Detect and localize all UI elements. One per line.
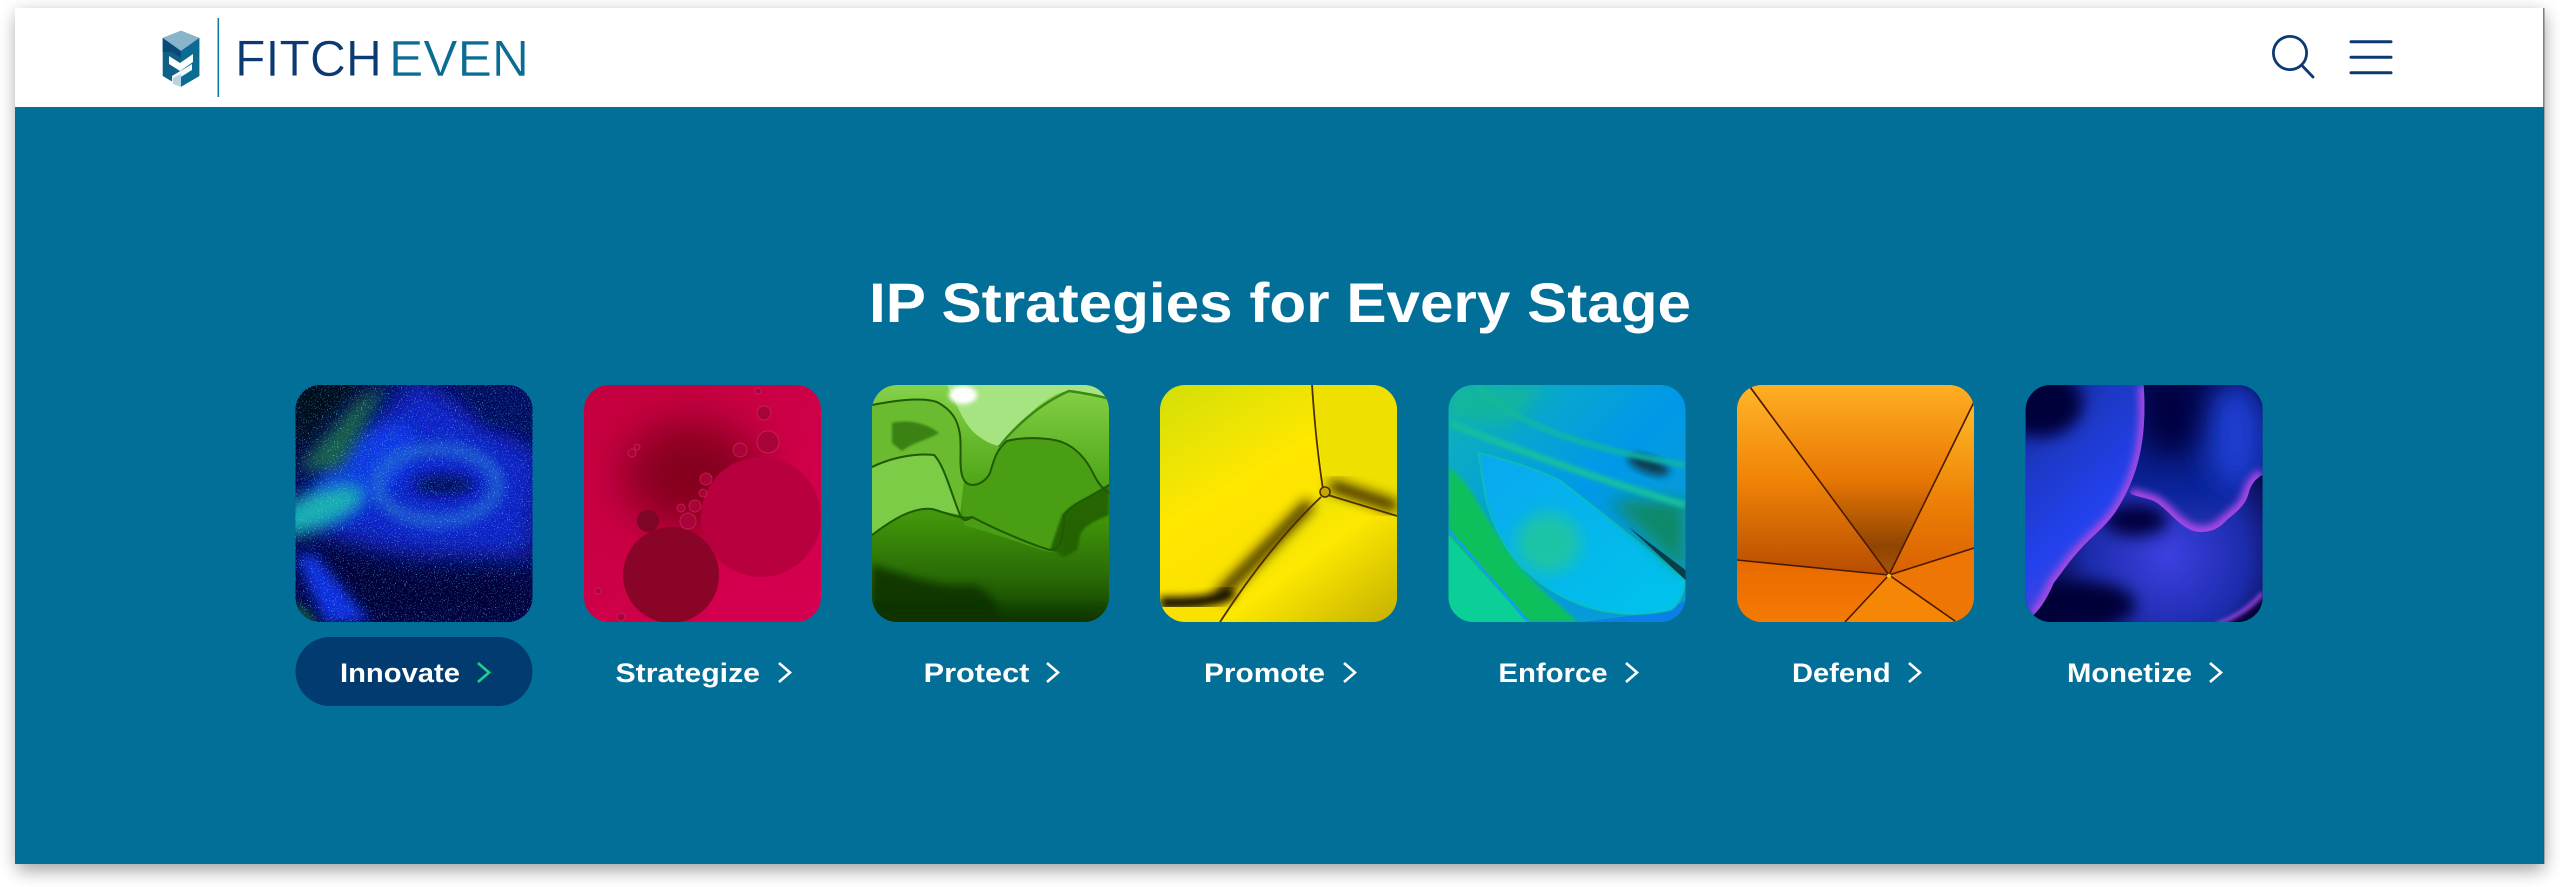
link: Protect [924,658,1058,688]
tile: Strategize [584,385,821,622]
icon: logo cube [163,31,199,87]
tile: Innovate [296,385,532,622]
wordmark: FITCH [235,30,382,87]
panel: header bar [15,8,2544,107]
tile: Monetize [2026,385,2263,622]
tile: Promote [1160,385,1397,622]
icon: menu [2351,42,2391,73]
link: Protect: Protect [924,658,1029,688]
icon: search [2273,36,2313,77]
link: Enforce: Enforce [1498,658,1608,688]
tile: Defend [1737,385,1974,622]
tile: Protect [872,385,1109,630]
logo: Fitch Even [163,18,529,97]
link: Strategize: Strategize [616,658,760,688]
title: IP Strategies for Every Stage [869,271,1691,334]
link: Promote: Promote [1204,658,1325,688]
logo: Fitch Even: EVEN [389,30,529,87]
button: Innovate [296,637,532,706]
link: Monetize: Monetize [2067,658,2192,688]
chevron [478,663,489,682]
divider [218,18,219,97]
tile: Enforce [1448,385,1686,622]
link: Defend: Defend [1792,658,1891,688]
button: Innovate: Innovate [340,658,460,688]
